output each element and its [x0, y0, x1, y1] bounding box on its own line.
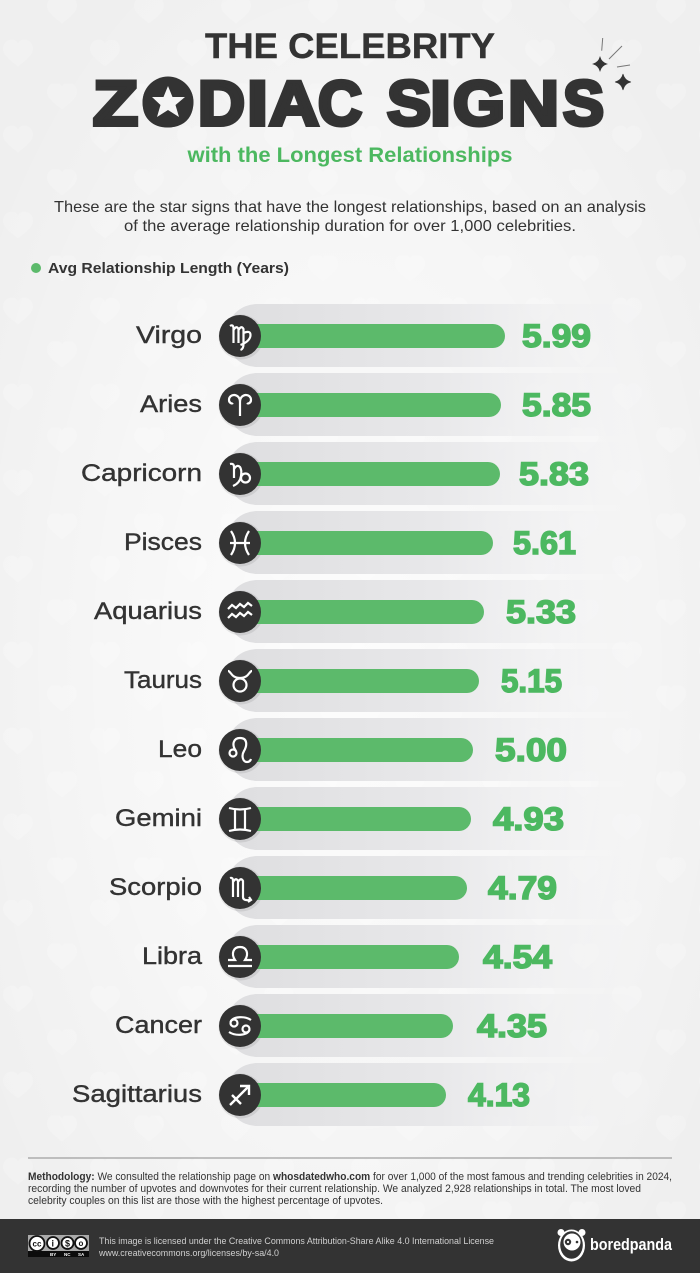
title: Zodiac Signs with star: Z: [93, 69, 138, 139]
row: Leo: 5.00: [495, 732, 567, 768]
row: Capricorn: Capricorn: [81, 460, 202, 487]
row: Aquarius: [94, 580, 650, 643]
row: Gemini: [115, 787, 650, 850]
row: Cancer: Cancer: [115, 1012, 202, 1039]
icon: creative commons badge: o: [78, 1239, 84, 1248]
logo: boredpanda: boredpanda: [590, 1235, 672, 1254]
title: Zodiac Signs with star: I: [430, 69, 451, 139]
methodology note: [28, 1171, 672, 1207]
logo: boredpanda: [558, 1229, 672, 1262]
row: Pisces: Pisces: [124, 529, 202, 556]
icon: creative commons badge: BY: [50, 1252, 56, 1257]
title: The Celebrity: THE CELEBRITY: [205, 26, 495, 66]
row: Virgo: 5.99: [522, 318, 591, 354]
row: Aries: 5.85: [522, 387, 591, 423]
title: Zodiac Signs with star: I: [247, 69, 268, 139]
row: Virgo: Virgo: [136, 322, 202, 349]
row: Taurus: [124, 649, 650, 712]
legend: Avg Relationship Length (Years): [48, 260, 289, 277]
title: Zodiac Signs with star: S: [563, 69, 604, 139]
icon: creative commons badge: NC: [64, 1252, 71, 1257]
methodology note: recording the number of upvotes and downvotes for their current relationship. We analyzed 2,928 relationships in total. The most loved: [28, 1183, 641, 1195]
row: Virgo: [136, 304, 650, 367]
license text: [98, 1236, 494, 1258]
row: Aries: Aries: [140, 391, 202, 418]
subtitle: with the Longest Relationships: [186, 144, 512, 167]
row: Taurus: Taurus: [124, 667, 202, 694]
title: Zodiac Signs with star: D: [198, 69, 245, 139]
icon: creative commons badge: cc: [32, 1240, 42, 1248]
row: Gemini: Gemini: [115, 805, 202, 832]
icon: sparkles: [593, 38, 631, 90]
row: Sagittarius: Sagittarius: [72, 1081, 202, 1108]
title: Zodiac Signs with star: G: [453, 69, 505, 139]
methodology note: celebrity couples on this list are those with the highest percentage of upvotes.: [28, 1195, 383, 1207]
row: Aquarius: 5.33: [506, 594, 576, 630]
intro text: These are the star signs that have the longest relationships, based on an analysis: [54, 199, 646, 216]
license text: This image is licensed under the Creative Commons Attribution-Share Alike 4.0 International License: [99, 1236, 494, 1246]
title: Zodiac Signs with star: N: [508, 69, 559, 139]
title: Zodiac Signs with star: S: [387, 69, 431, 139]
license text: www.creativecommons.org/licenses/by-sa/4.0: [98, 1248, 279, 1258]
row: Libra: 4.54: [483, 939, 552, 975]
row: Pisces: [124, 511, 650, 574]
row: Libra: Libra: [142, 943, 202, 970]
row: Taurus: 5.15: [501, 663, 562, 699]
row: Cancer: [115, 994, 650, 1057]
row: Pisces: 5.61: [513, 525, 576, 561]
methodology note: Methodology: We consulted the relationship page on whosdatedwho.com for over 1,000 of the most famous and trending celebrities in 2024,: [28, 1171, 672, 1183]
icon: creative commons badge: $: [65, 1238, 70, 1248]
row: Capricorn: [81, 442, 650, 505]
row: Scorpio: Scorpio: [109, 874, 202, 901]
row: Gemini: 4.93: [493, 801, 564, 837]
footer bar: [0, 1219, 700, 1273]
icon: creative commons badge: i: [52, 1238, 54, 1248]
intro text: [54, 199, 646, 235]
row: Scorpio: 4.79: [488, 870, 557, 906]
row: Cancer: 4.35: [477, 1008, 547, 1044]
title: Zodiac Signs with star: C: [318, 69, 362, 139]
title: Zodiac Signs with star: A: [269, 69, 319, 139]
row: Sagittarius: 4.13: [468, 1077, 530, 1113]
intro text: of the average relationship duration for over 1,000 celebrities.: [124, 218, 576, 235]
row: Leo: [158, 718, 650, 781]
icon: creative commons badge: [28, 1235, 89, 1257]
icon: creative commons badge: SA: [78, 1252, 85, 1257]
row: Capricorn: 5.83: [519, 456, 589, 492]
row: Leo: Leo: [158, 736, 202, 763]
title: Zodiac Signs with star: O: [142, 69, 194, 139]
row: Aries: [140, 373, 650, 436]
row: Sagittarius: [72, 1063, 650, 1126]
row: Scorpio: [109, 856, 650, 919]
row: Libra: [142, 925, 650, 988]
row: Aquarius: Aquarius: [94, 598, 202, 625]
title: Zodiac Signs with star: [93, 69, 604, 139]
